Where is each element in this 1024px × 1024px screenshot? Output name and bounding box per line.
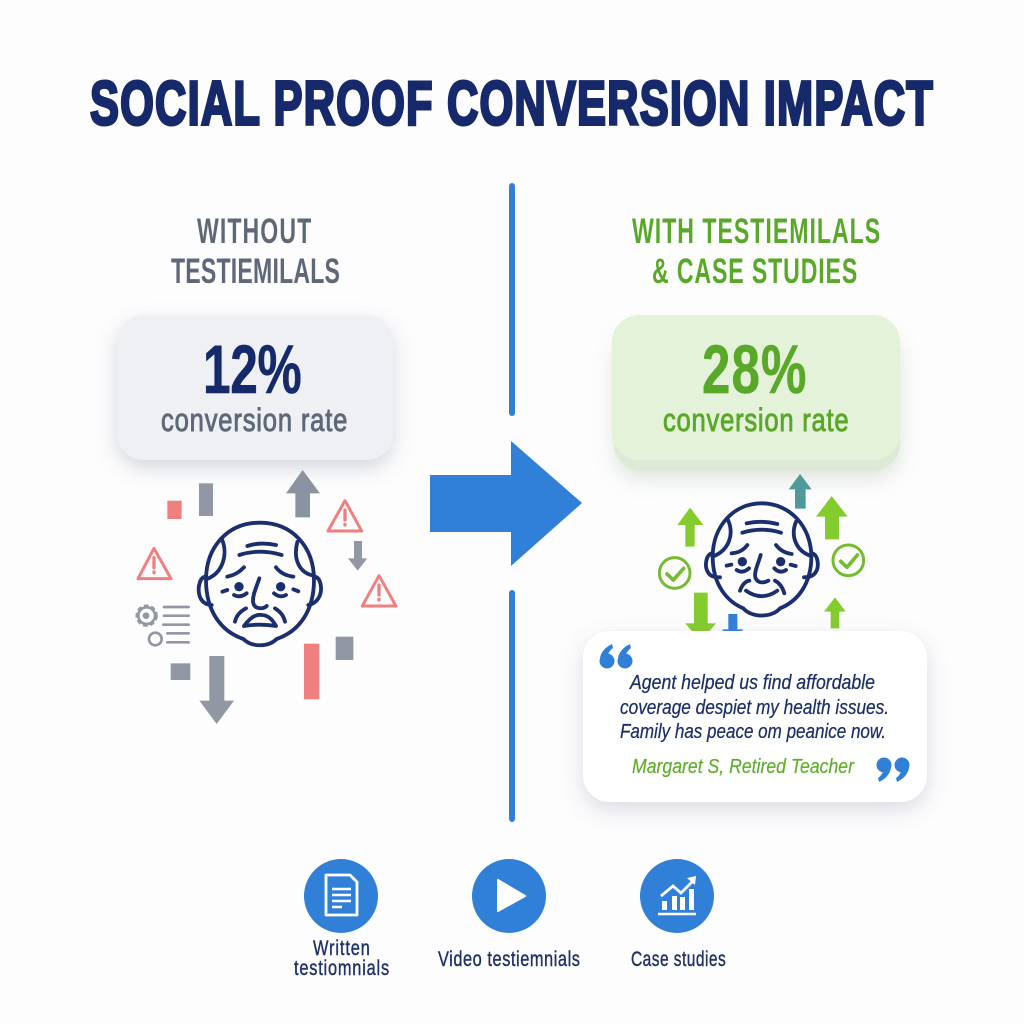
metric blocks and arrows — [167, 470, 367, 724]
illustration: smiling face with rising metrics — [659, 474, 864, 642]
label: video testimonials: Video testiemnials — [438, 947, 580, 970]
label: written testimonials: Written — [313, 936, 370, 959]
heading: without testimonials — [171, 212, 340, 291]
icon: case study chart — [640, 859, 714, 933]
warning icons — [138, 501, 396, 606]
legend: testimonial formats — [294, 859, 726, 979]
quote text: Family has peace om peanice now. — [620, 721, 886, 743]
quote text: coverage despiet my health issues. — [620, 697, 889, 719]
rising arrows — [677, 474, 848, 642]
icon: opening quote — [600, 644, 632, 668]
icon: video play — [472, 859, 546, 933]
heading: with testimonials and case studies — [632, 212, 880, 291]
attribution: Margaret S, Retired Teacher — [632, 755, 855, 778]
heading: with testimonials and case studies: & CASE STUDIES — [652, 252, 857, 291]
divider: upper — [509, 183, 515, 416]
stat card: 12%: conversion rate — [161, 403, 347, 439]
stat card: 28% — [612, 315, 900, 471]
arrow: left to right — [430, 441, 582, 566]
illustration: worried face with falling metrics — [137, 470, 396, 724]
label: written testimonials: testiomnials — [294, 956, 389, 979]
title: SOCIAL PROOF CONVERSION IMPACT — [90, 70, 933, 138]
divider: lower — [509, 590, 515, 822]
face: worried — [199, 523, 321, 645]
label: written testimonials — [294, 936, 389, 979]
stat card: 12% — [117, 315, 393, 460]
panel: with testimonials — [583, 212, 927, 802]
check icons — [659, 545, 864, 588]
heading: with testimonials and case studies: WITH TESTIEMILALS — [632, 212, 880, 251]
label: case studies: Case studies — [631, 947, 726, 971]
icon: written document — [304, 859, 378, 933]
heading: without testimonials: WITHOUT — [197, 212, 311, 251]
panel: without testimonials — [117, 212, 396, 724]
stat card: 28%: 28% — [702, 330, 806, 408]
face: relieved — [706, 503, 818, 616]
heading: without testimonials: TESTIEMILALS — [171, 252, 340, 291]
testimonial card — [583, 631, 927, 802]
icon: closing quote — [876, 758, 910, 782]
quote text: Agent helped us find affordable — [629, 672, 875, 694]
quote text — [620, 672, 889, 743]
stat card: 12%: 12% — [203, 331, 302, 408]
gear and list icon — [137, 606, 189, 645]
stat card: 28%: conversion rate — [663, 403, 849, 439]
